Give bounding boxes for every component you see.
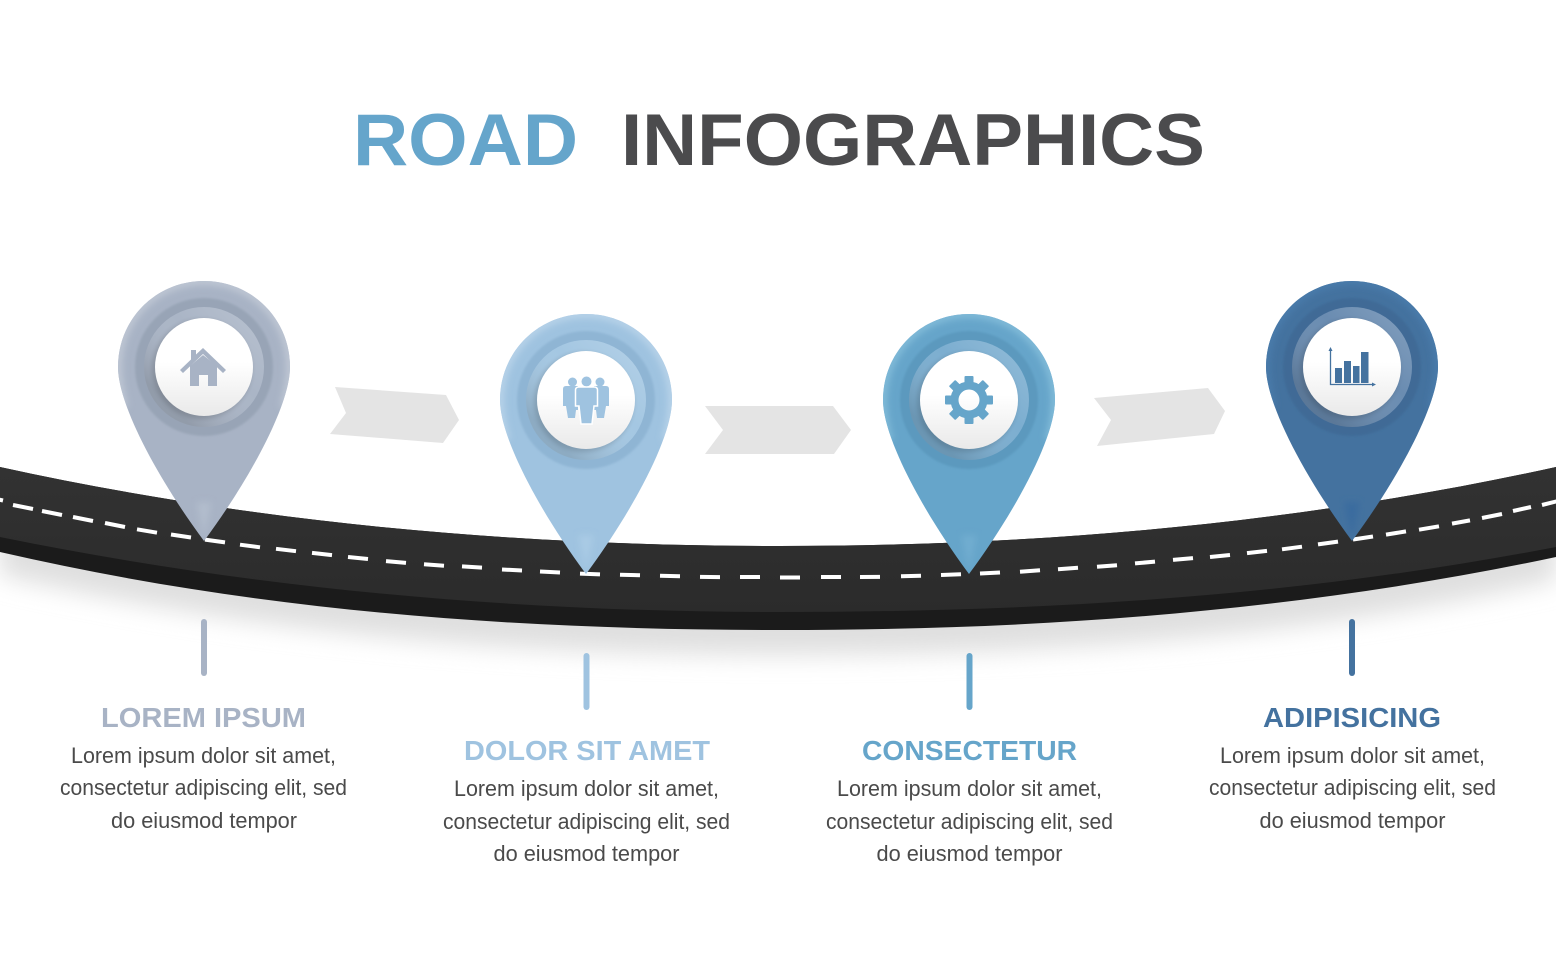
body: Lorem ipsum dolor sit amet, (837, 776, 1102, 801)
body: do eiusmod tempor (1260, 808, 1446, 833)
connector line 3 (966, 653, 972, 710)
body: Lorem ipsum dolor sit amet, (1220, 743, 1485, 768)
text block 1 (60, 702, 347, 833)
heading: DOLOR SIT AMET (464, 735, 710, 766)
pin 1: home (114, 277, 294, 547)
pin body (496, 310, 676, 580)
body: do eiusmod tempor (876, 841, 1062, 866)
pin 3: gear (879, 310, 1059, 580)
body: consectetur adipiscing elit, sed (826, 809, 1113, 834)
pin rings (517, 331, 655, 469)
pin rings (1283, 298, 1421, 436)
road (0, 467, 1556, 655)
heading: CONSECTETUR (862, 735, 1077, 766)
pin 4: chart (1262, 277, 1442, 547)
arrow 2 (705, 406, 851, 454)
pin rings (900, 331, 1038, 469)
body: do eiusmod tempor (494, 841, 680, 866)
body: Lorem ipsum dolor sit amet, (454, 776, 719, 801)
pin rings (135, 298, 273, 436)
text block 3 (826, 735, 1113, 866)
pin white disc (920, 351, 1018, 449)
pin body (114, 277, 294, 547)
body: consectetur adipiscing elit, sed (443, 809, 730, 834)
body (60, 743, 347, 833)
title (353, 100, 1205, 181)
title word: ROAD: ROAD (353, 100, 578, 181)
body (1209, 743, 1496, 833)
arrow 3 (1094, 388, 1225, 446)
icon: house (180, 348, 226, 386)
pin body (1262, 277, 1442, 547)
pin white disc (155, 318, 253, 416)
heading: ADIPISICING (1263, 702, 1441, 733)
body (443, 776, 730, 866)
pin white disc (537, 351, 635, 449)
body: consectetur adipiscing elit, sed (1209, 775, 1496, 800)
title word: INFOGRAPHICS: INFOGRAPHICS (621, 100, 1205, 181)
body: do eiusmod tempor (111, 808, 297, 833)
icon: bar chart (1328, 347, 1376, 386)
arrow 1 (330, 387, 459, 443)
icon: gear (945, 376, 993, 424)
icon: people (563, 376, 609, 424)
heading: LOREM IPSUM (101, 702, 306, 733)
road centre dashes (0, 497, 1556, 578)
body (826, 776, 1113, 866)
road surface (0, 467, 1556, 612)
text block 4 (1209, 702, 1496, 833)
text block 2 (443, 735, 730, 866)
connector line 1 (201, 619, 207, 676)
road shadow (0, 505, 1556, 655)
road side edge (0, 467, 1556, 630)
connector line 4 (1349, 619, 1355, 676)
pin white disc (1303, 318, 1401, 416)
pin body (879, 310, 1059, 580)
body: Lorem ipsum dolor sit amet, (71, 743, 336, 768)
pin 2: people (496, 310, 676, 580)
connector line 2 (584, 653, 590, 710)
body: consectetur adipiscing elit, sed (60, 775, 347, 800)
